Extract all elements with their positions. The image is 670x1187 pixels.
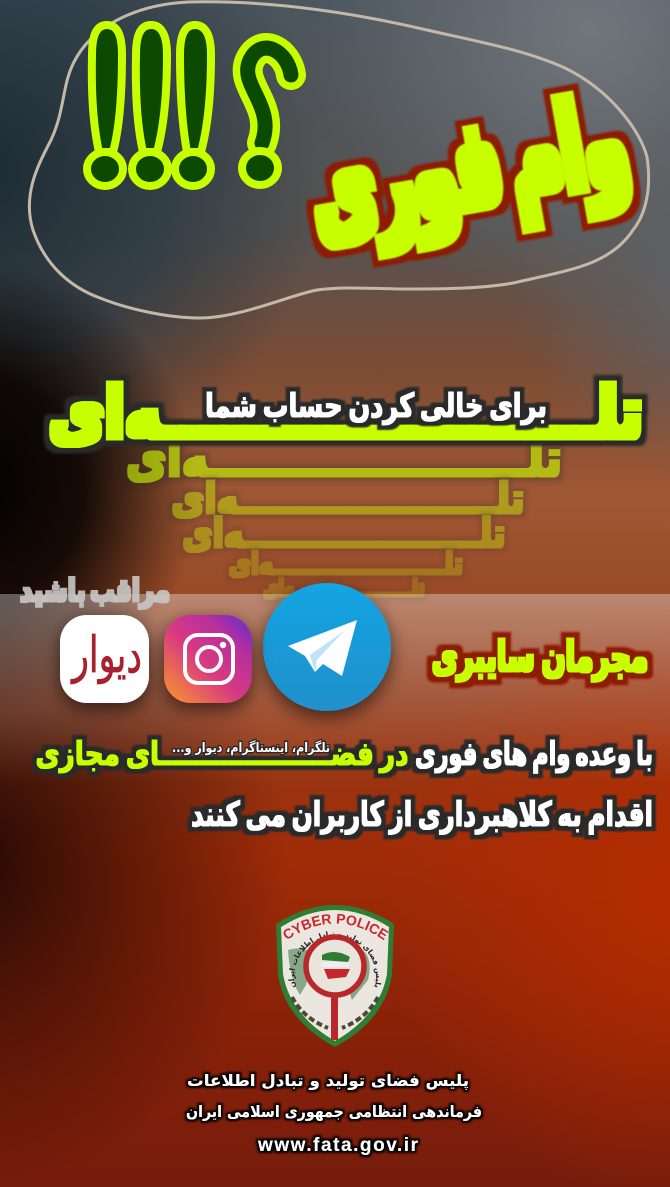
faded trap copies: تلـــــــــــــــــــــه‌ای <box>172 474 524 523</box>
green phrase: در فضـــــــــــــــــــای مجازی <box>36 734 408 773</box>
icon: divar: دیوار <box>70 626 142 684</box>
icon: telegram <box>263 583 391 711</box>
watermark: مراقب باشید <box>20 573 170 609</box>
subtitle: برای خالی کردن حساب شما <box>205 386 547 426</box>
question mark <box>242 48 291 185</box>
blob outline <box>29 2 649 318</box>
body line one <box>36 734 653 774</box>
trap word stack <box>49 372 643 602</box>
exclamation marks <box>87 25 211 186</box>
magnifier <box>306 937 364 1040</box>
globe <box>288 945 370 1000</box>
faded trap copies: تلـــــــــــــــــــــه‌ای <box>229 547 463 582</box>
small platforms note: تلگرام، اینستاگرام، دیوار و... <box>172 740 330 756</box>
icon: instagram <box>164 615 252 703</box>
faded trap copies: تلـــــــــــــــــــــه‌ای <box>126 429 562 489</box>
badge motto: پلیس فضای تولید و تبادل اطلاعات ایران <box>288 931 382 988</box>
footer line two: فرماندهی انتظامی جمهوری اسلامی ایران <box>186 1102 482 1121</box>
cyber police badge <box>276 905 394 1047</box>
faded trap copies: تلـــــــــــــــــــــه‌ای <box>264 574 424 602</box>
faded trap copies: تلـــــــــــــــــــــه‌ای <box>182 511 506 557</box>
footer line one: پلیس فضای تولید و تبادل اطلاعات <box>187 1071 469 1091</box>
footer text <box>186 1071 482 1156</box>
badge heading: CYBER POLICE <box>284 914 389 940</box>
website: www.fata.gov.ir <box>257 1135 419 1156</box>
icon: divar <box>60 615 149 703</box>
laurels <box>292 997 378 1028</box>
faded trap copies <box>126 429 562 602</box>
